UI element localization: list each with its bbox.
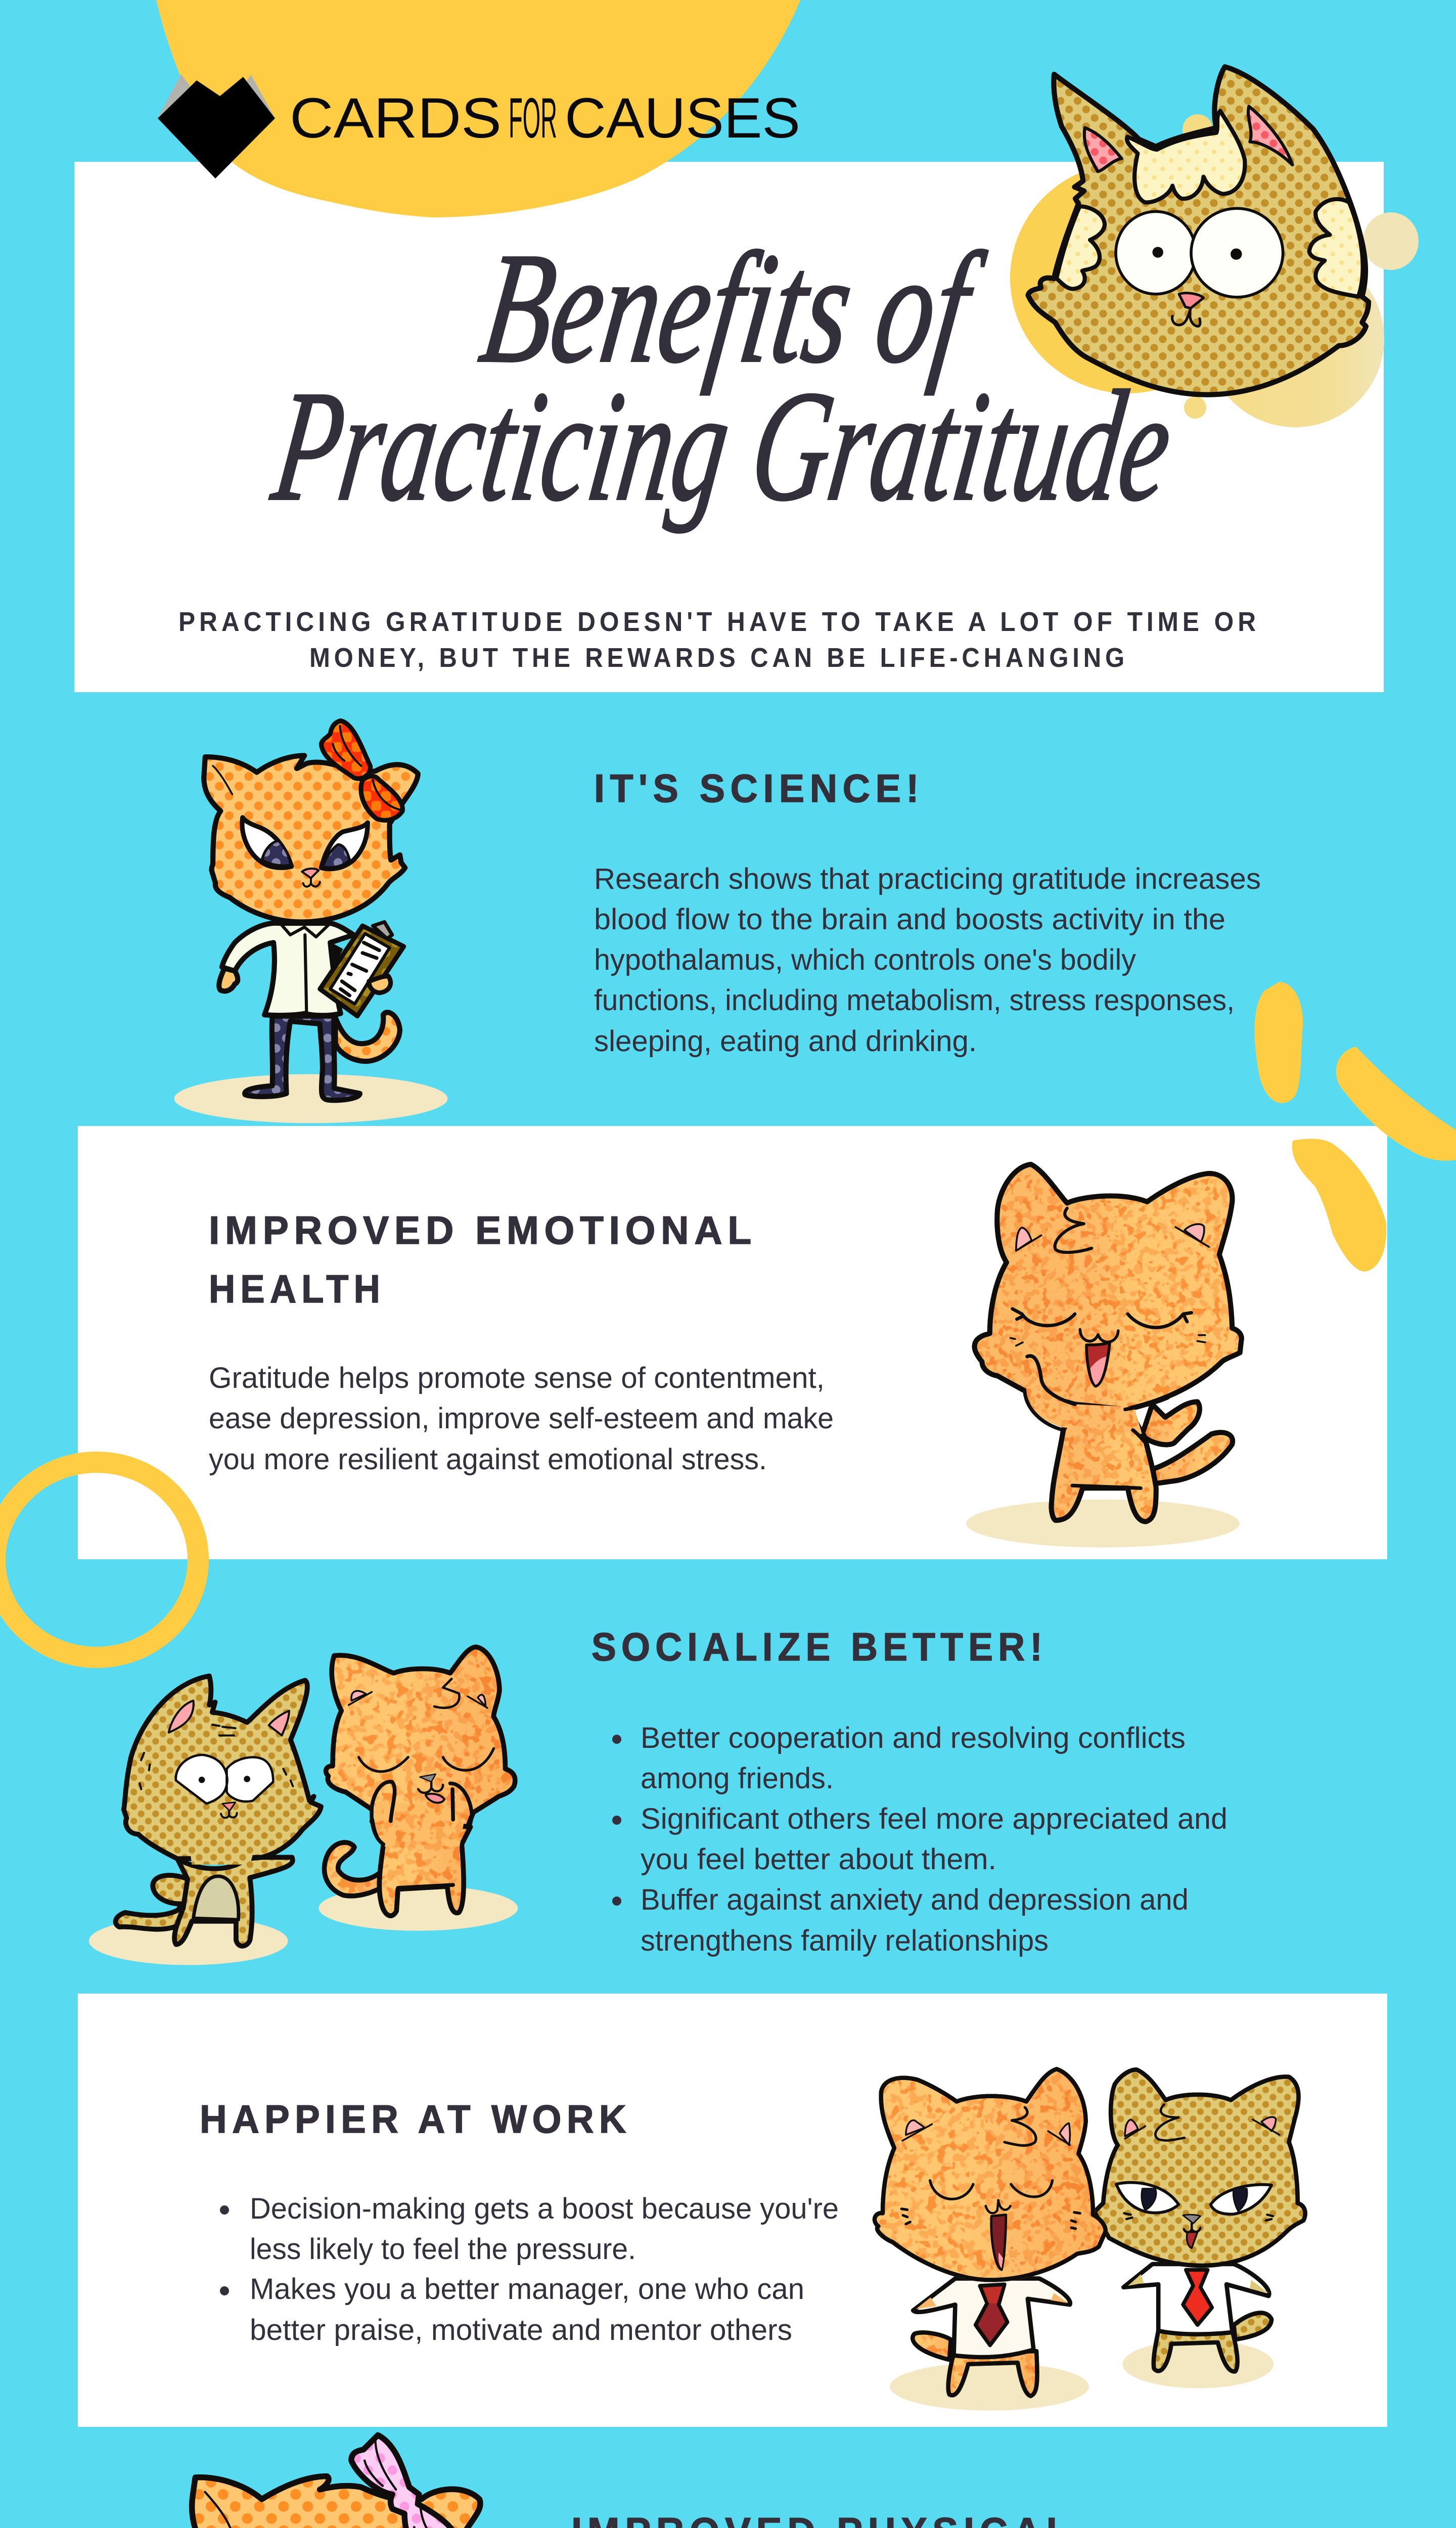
textured body <box>975 1164 1242 1522</box>
icon: emotional cat <box>966 1164 1242 1548</box>
body text: you more resilient against emotional stress. <box>209 1443 767 1476</box>
logo wordmark: CAUSES <box>565 86 800 150</box>
logo wordmark: FOR <box>509 86 557 150</box>
body text: blood flow to the brain and boosts activity in the <box>594 903 1225 936</box>
heading: HEALTH <box>209 1267 385 1311</box>
eyes <box>242 818 292 868</box>
subtitle: MONEY, BUT THE REWARDS CAN BE LIFE-CHANGING <box>309 643 1128 673</box>
body text: Research shows that practicing gratitude increases <box>594 863 1261 895</box>
head <box>204 755 418 922</box>
title: Benefits of <box>472 220 994 396</box>
left hand <box>219 968 238 991</box>
logo mark: black diamond heart <box>158 74 275 178</box>
heading: IT'S SCIENCE! <box>594 766 924 810</box>
section: it's science <box>594 766 1261 1058</box>
logo wordmark <box>290 86 800 150</box>
floor shadow <box>174 1074 447 1123</box>
body text: sleeping, eating and drinking. <box>594 1025 977 1058</box>
bullet list: Decision-making gets a boost because you're <box>250 2192 839 2225</box>
icon: two office cats <box>875 2069 1305 2411</box>
tail <box>335 1012 400 1061</box>
ring, left <box>0 1462 198 1657</box>
whiskers <box>1011 1335 1205 1346</box>
body text: hypothalamus, which controls one's bodily <box>594 943 1136 976</box>
forelock <box>1055 1208 1091 1252</box>
body text: Gratitude helps promote sense of contentment, <box>209 1362 825 1394</box>
bullet list: Significant others feel more appreciated and <box>641 1802 1227 1835</box>
decorative yellow strokes over panel edge <box>1292 1047 1456 1272</box>
heading <box>209 1208 757 1311</box>
bullet list: Better cooperation and resolving conflicts <box>641 1722 1186 1754</box>
title <box>263 220 1181 534</box>
bow <box>351 2435 459 2528</box>
decorative yellow blob, top <box>156 0 800 217</box>
left cat head <box>875 2069 1106 2280</box>
subtitle: PRACTICING GRATITUDE DOESN'T HAVE TO TAKE A LOT OF TIME OR <box>178 607 1260 637</box>
body text <box>594 863 1261 1058</box>
bullet list: strengthens family relationships <box>641 1924 1049 1957</box>
floor shadows <box>890 2340 1273 2411</box>
decorative circles behind header cat <box>1010 114 1419 427</box>
bullet list <box>220 2192 839 2346</box>
body text <box>209 1362 834 1476</box>
bullet list: you feel better about them. <box>641 1843 996 1876</box>
heading: SOCIALIZE BETTER! <box>592 1624 1048 1669</box>
floor shadow <box>966 1500 1240 1548</box>
left cat <box>116 1875 188 1929</box>
icon: header cat face <box>1028 67 1369 395</box>
bullet list: Buffer against anxiety and depression and <box>641 1883 1189 1916</box>
heading: IMPROVED EMOTIONAL <box>209 1208 757 1252</box>
ears <box>1016 1224 1204 1251</box>
body text: functions, including metabolism, stress responses, <box>594 984 1235 1017</box>
body text: ease depression, improve self-esteem and make <box>209 1402 834 1435</box>
logo wordmark: CARDS <box>290 86 502 150</box>
heading: HAPPIER AT WORK <box>200 2097 631 2141</box>
nose and mouth <box>302 869 318 878</box>
bullet list: Makes you a better manager, one who can <box>250 2273 804 2306</box>
left cat textured lower body <box>913 2332 1037 2396</box>
right cat <box>1234 2313 1271 2339</box>
icon: science cat with clipboard <box>174 721 447 1123</box>
head <box>192 2476 480 2528</box>
logo <box>158 74 800 178</box>
icon: running cat <box>144 2435 480 2528</box>
section: socialize better <box>592 1624 1227 1957</box>
bullet list: among friends. <box>641 1762 834 1795</box>
bow <box>321 721 371 779</box>
bullet list: better praise, motivate and mentor others <box>250 2314 792 2346</box>
shirt <box>222 923 353 1015</box>
trousers <box>245 1016 360 1100</box>
closed eyes <box>1013 1309 1192 1328</box>
right cat, textured <box>324 1647 515 1916</box>
bullet list <box>612 1722 1227 1957</box>
panel: header <box>74 162 1384 692</box>
bullet list: less likely to feel the pressure. <box>250 2233 636 2266</box>
clipboard <box>320 926 404 1016</box>
icon: two socializing cats <box>89 1647 518 1965</box>
panel: happier at work <box>78 1994 1387 2427</box>
subtitle <box>178 607 1260 673</box>
decorative yellow strokes, right <box>1255 982 1303 1103</box>
panel: improved emotional health <box>78 1126 1387 1559</box>
mouth <box>1080 1329 1118 1342</box>
floor shadows <box>89 1885 518 1965</box>
